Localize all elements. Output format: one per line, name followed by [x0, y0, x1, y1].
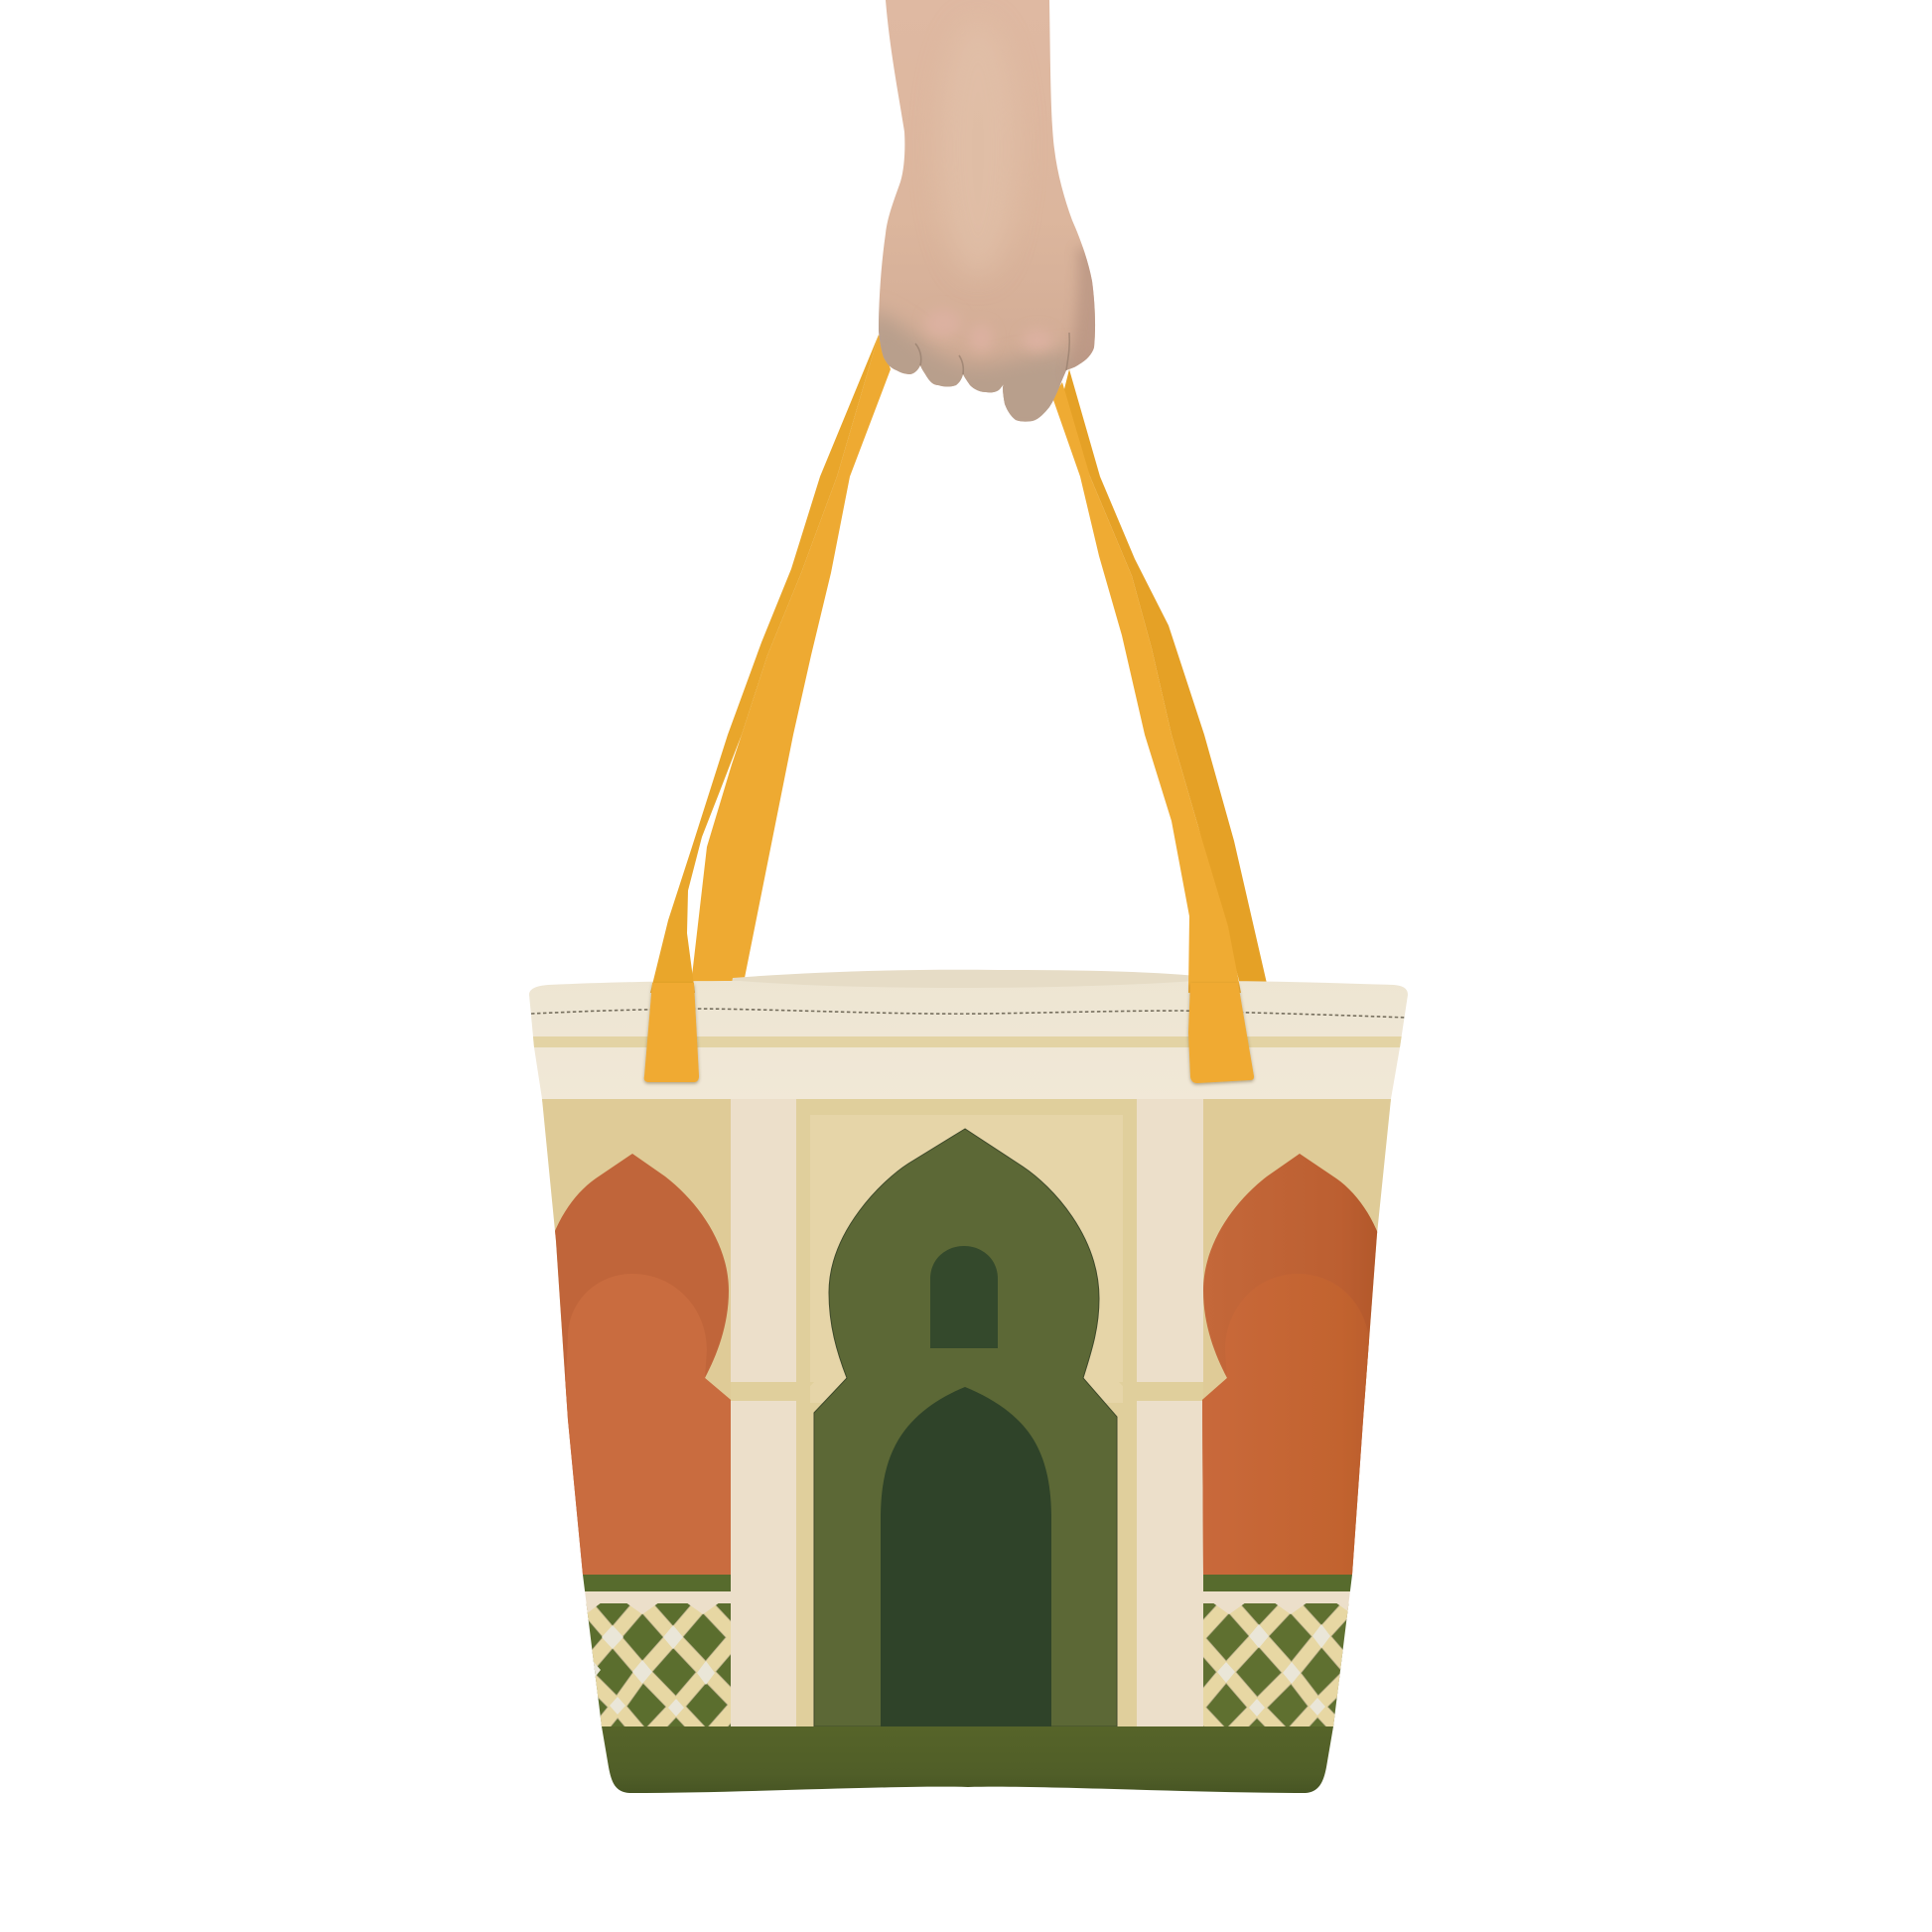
skin base: [879, 0, 1095, 422]
finger shading: [879, 309, 1078, 422]
illustration: hand carrying tote bag: [529, 0, 1408, 1793]
knuckle highlights: [933, 317, 1047, 349]
center panel frame: [796, 1099, 1137, 1726]
bag fabric hem: [516, 973, 1420, 1102]
right column cap: [1119, 1382, 1203, 1401]
forearm highlight: [962, 178, 995, 256]
tab: [1188, 983, 1254, 1083]
left column cap: [731, 1382, 814, 1401]
right green band: [1203, 1575, 1352, 1591]
right cream band: [1203, 1591, 1350, 1603]
center green arch: [814, 1129, 1117, 1726]
right lattice: [1203, 1603, 1348, 1726]
center panel inner: [810, 1115, 1123, 1403]
bag body: [516, 973, 1420, 1806]
back handle right: [1062, 369, 1268, 988]
right tan panel: [1203, 1099, 1391, 1400]
tab: [644, 983, 699, 1082]
right orange arch: [1202, 1154, 1378, 1575]
left cream column: [731, 1099, 796, 1726]
left orange arch: [536, 1154, 731, 1575]
left cream band: [585, 1591, 731, 1603]
back handle left: [690, 335, 891, 988]
finger creases: [915, 333, 1069, 374]
left green band: [583, 1575, 731, 1591]
stitching line: [531, 1009, 1408, 1018]
bag green base: [602, 1726, 1333, 1793]
tan horizontal band: [516, 1036, 1420, 1047]
pinky side shading: [1069, 246, 1095, 369]
left inner arch: [565, 1274, 731, 1575]
strap: [650, 335, 879, 993]
right cream column: [1137, 1099, 1203, 1726]
front handle left: [644, 335, 879, 1082]
hand and arm: [879, 0, 1096, 422]
left lattice: [586, 1603, 731, 1726]
arch window: [930, 1246, 998, 1348]
arch door: [881, 1387, 1051, 1726]
right inner arch: [1202, 1340, 1369, 1575]
strap: [1052, 382, 1241, 993]
bag interior back edge: [730, 970, 1201, 993]
left tan panel: [542, 1099, 731, 1402]
front handle right: [1052, 382, 1254, 1083]
